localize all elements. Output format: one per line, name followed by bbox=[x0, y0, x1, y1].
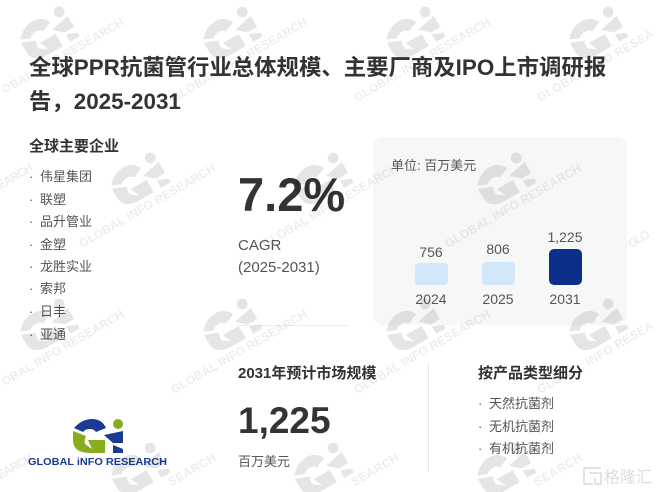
panel: product segments bbox=[478, 365, 583, 456]
panel: key companies: · bbox=[29, 304, 33, 319]
CAGR label: (2025-2031) bbox=[238, 259, 320, 276]
list: segments bbox=[478, 396, 554, 456]
panel: key companies bbox=[29, 138, 119, 342]
market size unit: 百万美元 bbox=[238, 454, 290, 469]
bar: 2031: 1,225 bbox=[547, 229, 583, 245]
watermark pattern: GLOBAL INFO RESEARCH bbox=[168, 307, 310, 397]
list: companies: 伟星集团 bbox=[40, 169, 92, 184]
title: 全球PPR抗菌管行业总体规模、主要厂商及IPO上市调研报告，2025-2031 bbox=[29, 55, 606, 114]
list: companies: 亚通 bbox=[40, 327, 66, 342]
list: companies: 索邦 bbox=[40, 281, 66, 296]
watermark pattern: GLOBAL INFO RESEARCH bbox=[352, 15, 493, 105]
panel: key companies: · bbox=[29, 281, 33, 296]
logo: Global Info Research: GLOBAL iNFO RESEARCH bbox=[28, 456, 167, 468]
panel: key companies: · bbox=[29, 214, 33, 229]
logo: Global Info Research bbox=[28, 419, 167, 468]
panel: key companies: · bbox=[29, 169, 33, 184]
watermark pattern: GLOBAL INFO RESEA bbox=[534, 318, 656, 397]
bar: 2025: 2025 bbox=[482, 291, 514, 307]
watermark pattern: SEARCH bbox=[348, 450, 401, 489]
panel: 2031 market size bbox=[238, 365, 376, 469]
CAGR value: 7.2% bbox=[238, 168, 345, 221]
panel: key companies: · bbox=[29, 192, 33, 207]
panel: product segments: · bbox=[478, 396, 482, 411]
watermark pattern: GLOBAL INFO RESEARCH bbox=[352, 307, 493, 397]
panel: product segments: · bbox=[478, 441, 482, 456]
watermark pattern: GLOBAL INFO RESEA bbox=[534, 26, 656, 105]
bar: 2024: 2024 bbox=[415, 291, 447, 307]
watermark pattern: GLOBAL INFO RESEARCH bbox=[260, 161, 401, 251]
bar: 2025 bbox=[482, 241, 515, 307]
bar: 2031: 2031 bbox=[549, 291, 581, 307]
list: segments: 天然抗菌剂 bbox=[489, 396, 554, 411]
bar: 2025: 806 bbox=[486, 241, 510, 257]
heading: key companies: 全球主要企业 bbox=[29, 138, 119, 155]
panel: bar chart bbox=[373, 137, 627, 325]
heading: product segments: 按产品类型细分 bbox=[478, 365, 583, 382]
watermark pattern: SEARCH bbox=[166, 450, 218, 489]
watermark pattern: OBAL INFO RESEARCH bbox=[0, 307, 126, 389]
bar: 2024: 756 bbox=[419, 244, 443, 260]
watermark pattern: SEARCH bbox=[532, 450, 584, 489]
heading: 2031 market size: 2031年预计市场规模 bbox=[238, 365, 376, 382]
corner watermark: Gelonghui: 格隆汇 bbox=[604, 468, 652, 486]
unit label: 单位: 百万美元 bbox=[391, 158, 476, 173]
watermark pattern: GLO bbox=[626, 227, 652, 251]
watermark pattern: GLOBAL INFO RESEARCH bbox=[77, 161, 218, 251]
CAGR label bbox=[238, 237, 320, 276]
bar: 2031 bbox=[547, 229, 583, 307]
list: companies: 日丰 bbox=[40, 304, 66, 319]
list: companies: 联塑 bbox=[40, 192, 66, 207]
list: companies: 金塑 bbox=[40, 237, 66, 252]
corner watermark: Gelonghui bbox=[583, 467, 652, 486]
panel: key companies: · bbox=[29, 327, 33, 342]
watermark pattern: GLOBAL INFO RESEARCH bbox=[168, 15, 310, 105]
market size value: 1,225 bbox=[238, 400, 331, 441]
list: companies: 品升管业 bbox=[40, 214, 92, 229]
list: companies bbox=[29, 169, 92, 342]
watermark pattern: OBAL INFO RESEARCH bbox=[0, 15, 126, 97]
panel: key companies: · bbox=[29, 259, 33, 274]
list: segments: 无机抗菌剂 bbox=[489, 419, 554, 434]
panel: product segments: · bbox=[478, 419, 482, 434]
CAGR label: CAGR bbox=[238, 237, 281, 254]
watermark pattern: GLOBAL INFO RESEARCH bbox=[442, 161, 584, 251]
panel: key companies: · bbox=[29, 237, 33, 252]
list: segments: 有机抗菌剂 bbox=[489, 441, 554, 456]
list: companies: 龙胜实业 bbox=[40, 259, 92, 274]
bar: 2024 bbox=[415, 244, 448, 307]
